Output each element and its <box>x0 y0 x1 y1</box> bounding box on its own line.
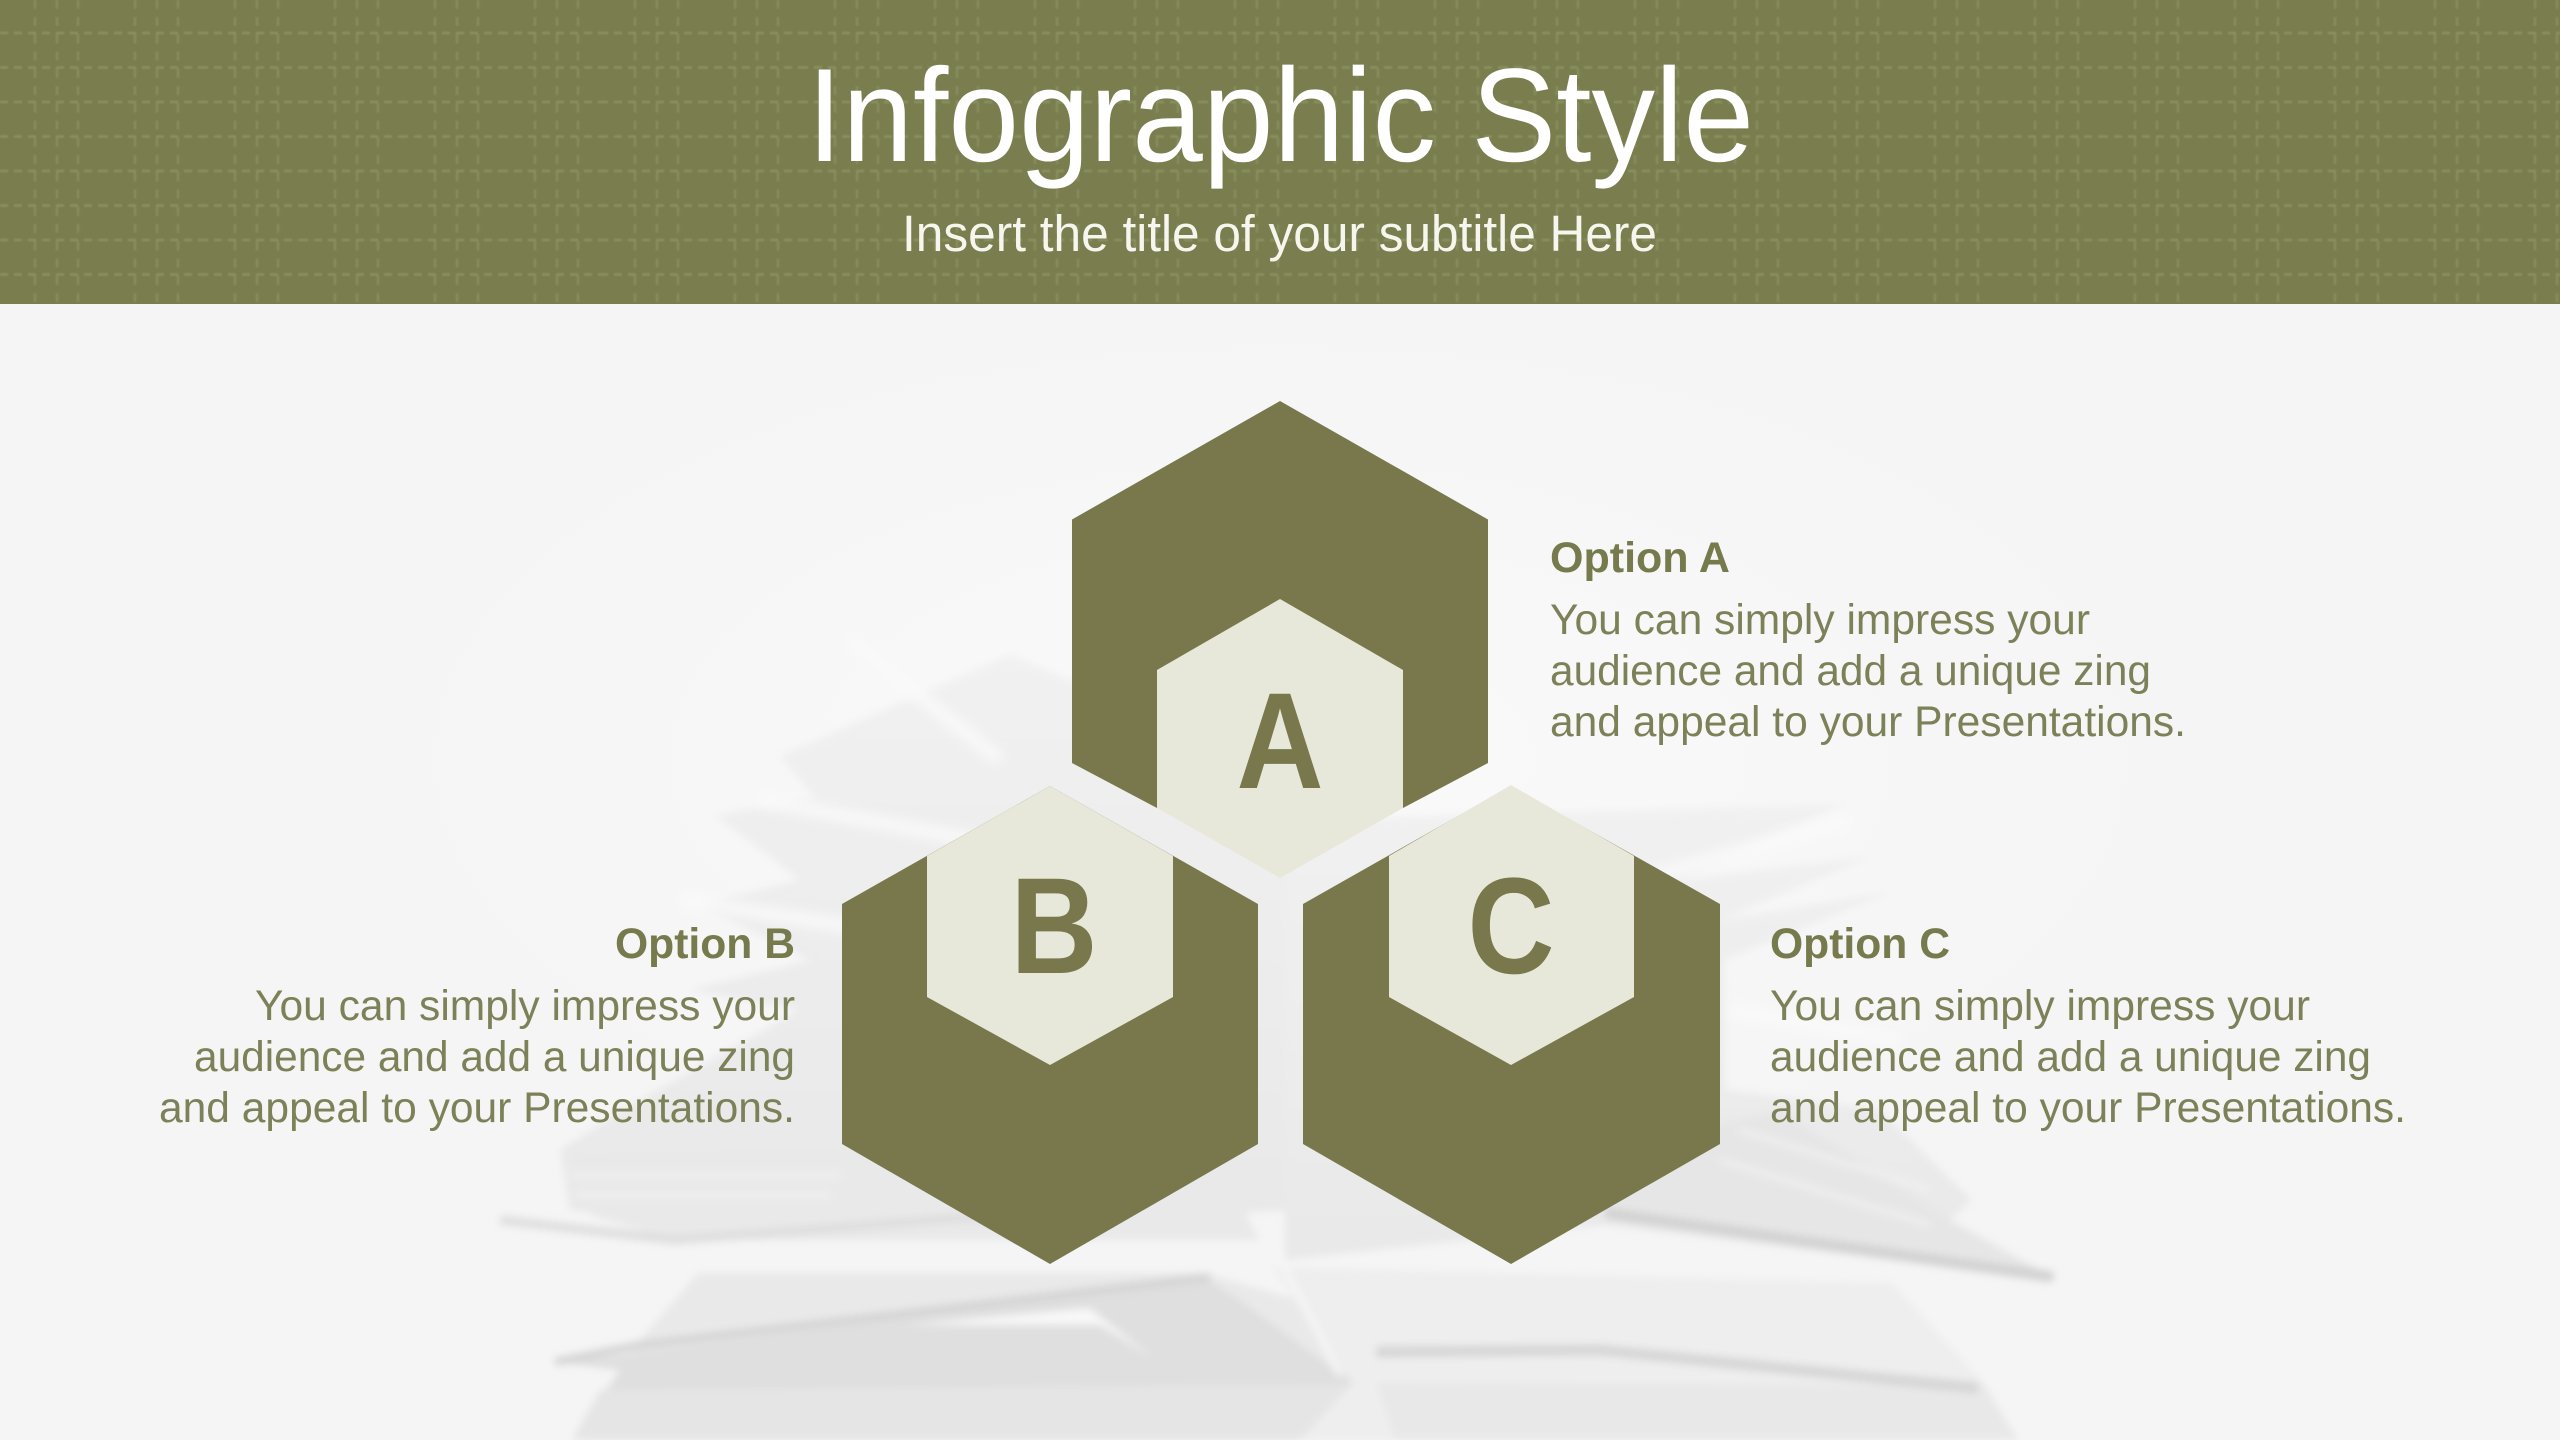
hexagon B <box>842 786 1258 1264</box>
text block: Option A: audience and add a unique zing <box>1550 647 2151 695</box>
text block: Option B: and appeal to your Presentations. <box>159 1084 795 1132</box>
title: Infographic Style <box>807 42 1754 190</box>
text block: Option B <box>159 920 795 1132</box>
letter B: B <box>1010 850 1098 1003</box>
text block: Option C: You can simply impress your <box>1770 982 2310 1030</box>
text block: Option A: You can simply impress your <box>1550 596 2090 644</box>
text block: Option C: audience and add a unique zing <box>1770 1033 2371 1081</box>
hexagon C <box>1303 785 1720 1264</box>
cover lines <box>1376 1350 1978 1388</box>
subtitle: Insert the title of your subtitle Here <box>902 205 1657 262</box>
text block: Option A: and appeal to your Presentations. <box>1550 698 2186 746</box>
hexagon A <box>1072 401 1488 878</box>
text block: Option B: You can simply impress your <box>255 982 795 1030</box>
lower-right book <box>1272 1267 2018 1440</box>
letter C: C <box>1467 850 1555 1003</box>
background: faded photo of open books <box>0 304 2560 1440</box>
letter A: A <box>1236 665 1324 818</box>
text block: Option C <box>1770 920 2406 1132</box>
text block: Option A <box>1550 534 2186 746</box>
text block: Option A: Option A <box>1550 534 1730 582</box>
header band <box>0 0 2560 304</box>
text block: Option B: audience and add a unique zing <box>194 1033 795 1081</box>
text block: Option C: and appeal to your Presentations. <box>1770 1084 2406 1132</box>
text block: Option B: Option B <box>615 920 795 968</box>
lower-left book <box>572 1273 1380 1440</box>
text block: Option C: Option C <box>1770 920 1950 968</box>
